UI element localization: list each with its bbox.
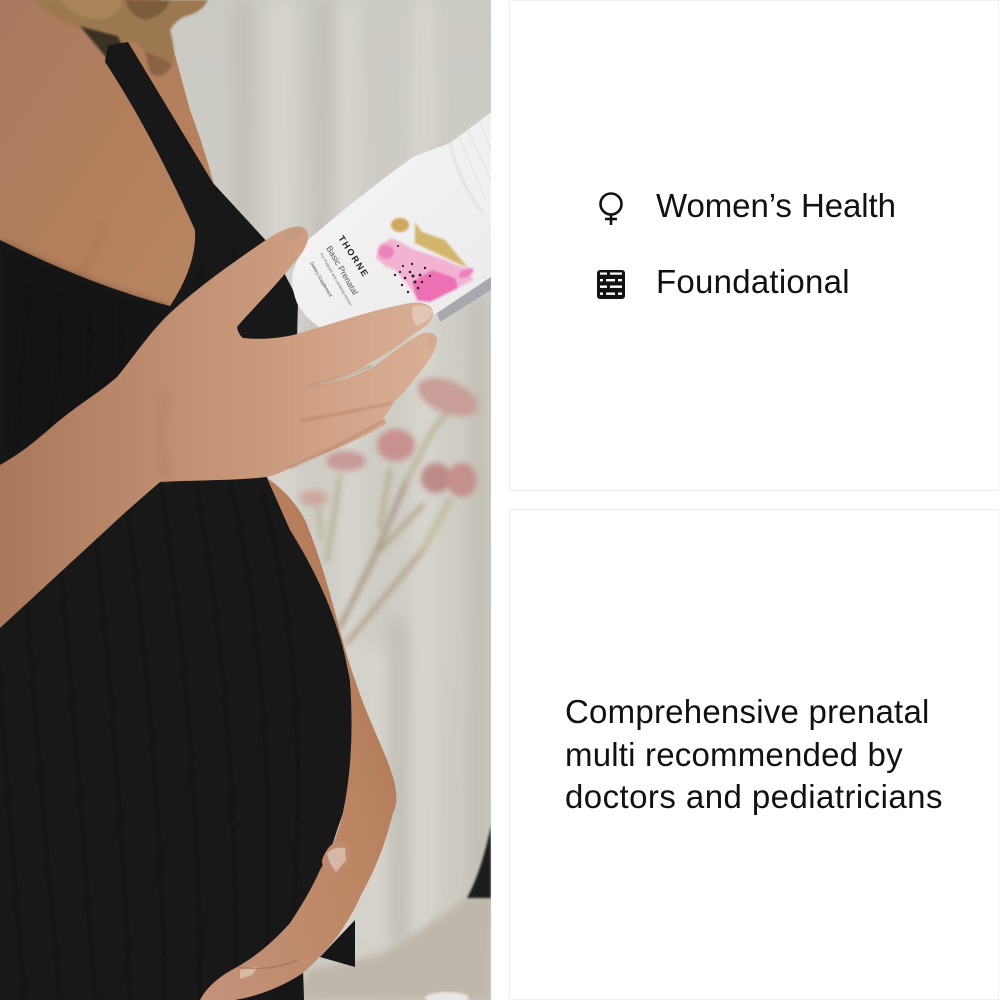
supplement bottle	[292, 113, 491, 345]
lower hand details	[237, 841, 350, 979]
label: Women's Health: Women’s Health	[656, 187, 896, 224]
curly hair	[35, 0, 208, 76]
dark fold at right edge	[467, 825, 491, 898]
knuckle creases	[290, 366, 392, 468]
bottle text: For Pregnant and Lactating Women	[319, 252, 353, 307]
panel: categories	[509, 0, 999, 491]
bottle label art	[376, 218, 475, 302]
fingernails	[412, 305, 433, 326]
panel: description	[509, 509, 999, 1000]
dark fabric behind lower hand	[235, 920, 355, 1000]
bottle text: THORNE	[336, 234, 371, 280]
forearm and hand holding bottle	[0, 227, 437, 628]
dried flowers	[300, 370, 484, 643]
bottle text: Dietary Supplement	[309, 261, 334, 298]
skin: chest and shoulder	[0, 0, 214, 320]
bottle text: Basic Prenatal	[324, 244, 360, 297]
icon: brick wall	[597, 270, 625, 299]
ribbed label edge	[437, 277, 491, 322]
curtain background	[0, 0, 491, 1000]
label: Foundational: Foundational	[656, 263, 850, 300]
bottle dots	[394, 245, 431, 293]
description text: multi recommended by	[565, 736, 903, 772]
arm behind belly and lower hand	[200, 478, 396, 1000]
description text	[565, 693, 943, 815]
bottle text	[309, 234, 371, 307]
description text: Comprehensive prenatal	[565, 693, 930, 730]
black ribbed dress	[0, 42, 352, 1000]
photo: pregnant woman holding supplement bottle	[0, 0, 491, 1000]
icon: female symbol	[599, 192, 623, 225]
description text: doctors and pediatricians	[565, 778, 943, 815]
ground blanket	[290, 895, 491, 1000]
